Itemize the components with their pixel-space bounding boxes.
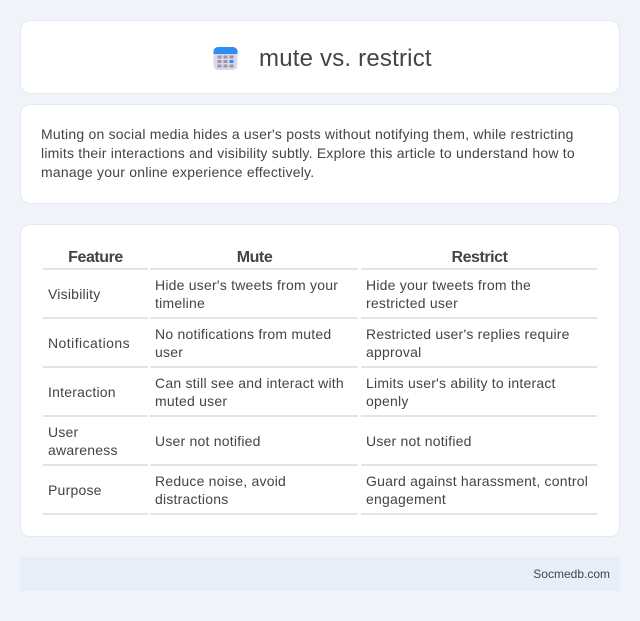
row: interaction: Limits user's ability to interact (366, 375, 556, 391)
row: interaction: Interaction (48, 384, 116, 400)
row: interaction: muted user (155, 393, 227, 409)
comparison table panel (20, 224, 620, 537)
intro text: manage your online experience effectively. (41, 164, 314, 180)
row: visibility: Hide user's tweets from your (155, 277, 338, 293)
row: notifications: No notifications from muted (155, 326, 331, 342)
row: notifications: user (155, 344, 183, 360)
row: notifications: approval (366, 344, 421, 360)
row: notifications: Restricted user's replies require (366, 326, 570, 342)
footer bar (20, 557, 620, 591)
row: interaction: openly (366, 393, 409, 409)
row: notifications: Notifications (48, 335, 130, 351)
row: purpose: engagement (366, 491, 446, 507)
row: interaction: Can still see and interact with (155, 375, 344, 391)
row: purpose: Purpose (48, 482, 102, 498)
row: interaction (48, 375, 556, 409)
intro text panel (20, 104, 620, 204)
row: visibility (48, 277, 531, 311)
icon: calendar (214, 47, 238, 70)
row: purpose: Guard against harassment, control (366, 473, 588, 489)
row: visibility: timeline (155, 295, 205, 311)
intro text (41, 126, 575, 180)
row: visibility: Visibility (48, 286, 101, 302)
footer text: Socmedb.com (533, 567, 610, 581)
title card (20, 20, 620, 94)
row: user awareness (48, 424, 472, 458)
row: notifications (48, 326, 570, 360)
table header: Mute (237, 249, 272, 266)
row: user awareness: User (48, 424, 78, 440)
intro text: limits their interactions and visibility subtly. Explore this article to understand how to (41, 145, 575, 161)
row: visibility: Hide your tweets from the (366, 277, 531, 293)
table header: Restrict (452, 249, 507, 266)
row: user awareness: awareness (48, 442, 118, 458)
intro text: Muting on social media hides a user's posts without notifying them, while restricting (41, 126, 574, 142)
table header: Feature (68, 249, 123, 266)
row: purpose (48, 473, 588, 507)
title: mute vs. restrict (259, 45, 432, 72)
table header (68, 249, 508, 266)
row: purpose: distractions (155, 491, 228, 507)
row: purpose: Reduce noise, avoid (155, 473, 286, 489)
row: visibility: restricted user (366, 295, 458, 311)
row: user awareness: User not notified (155, 433, 261, 449)
row: user awareness: User not notified (366, 433, 472, 449)
